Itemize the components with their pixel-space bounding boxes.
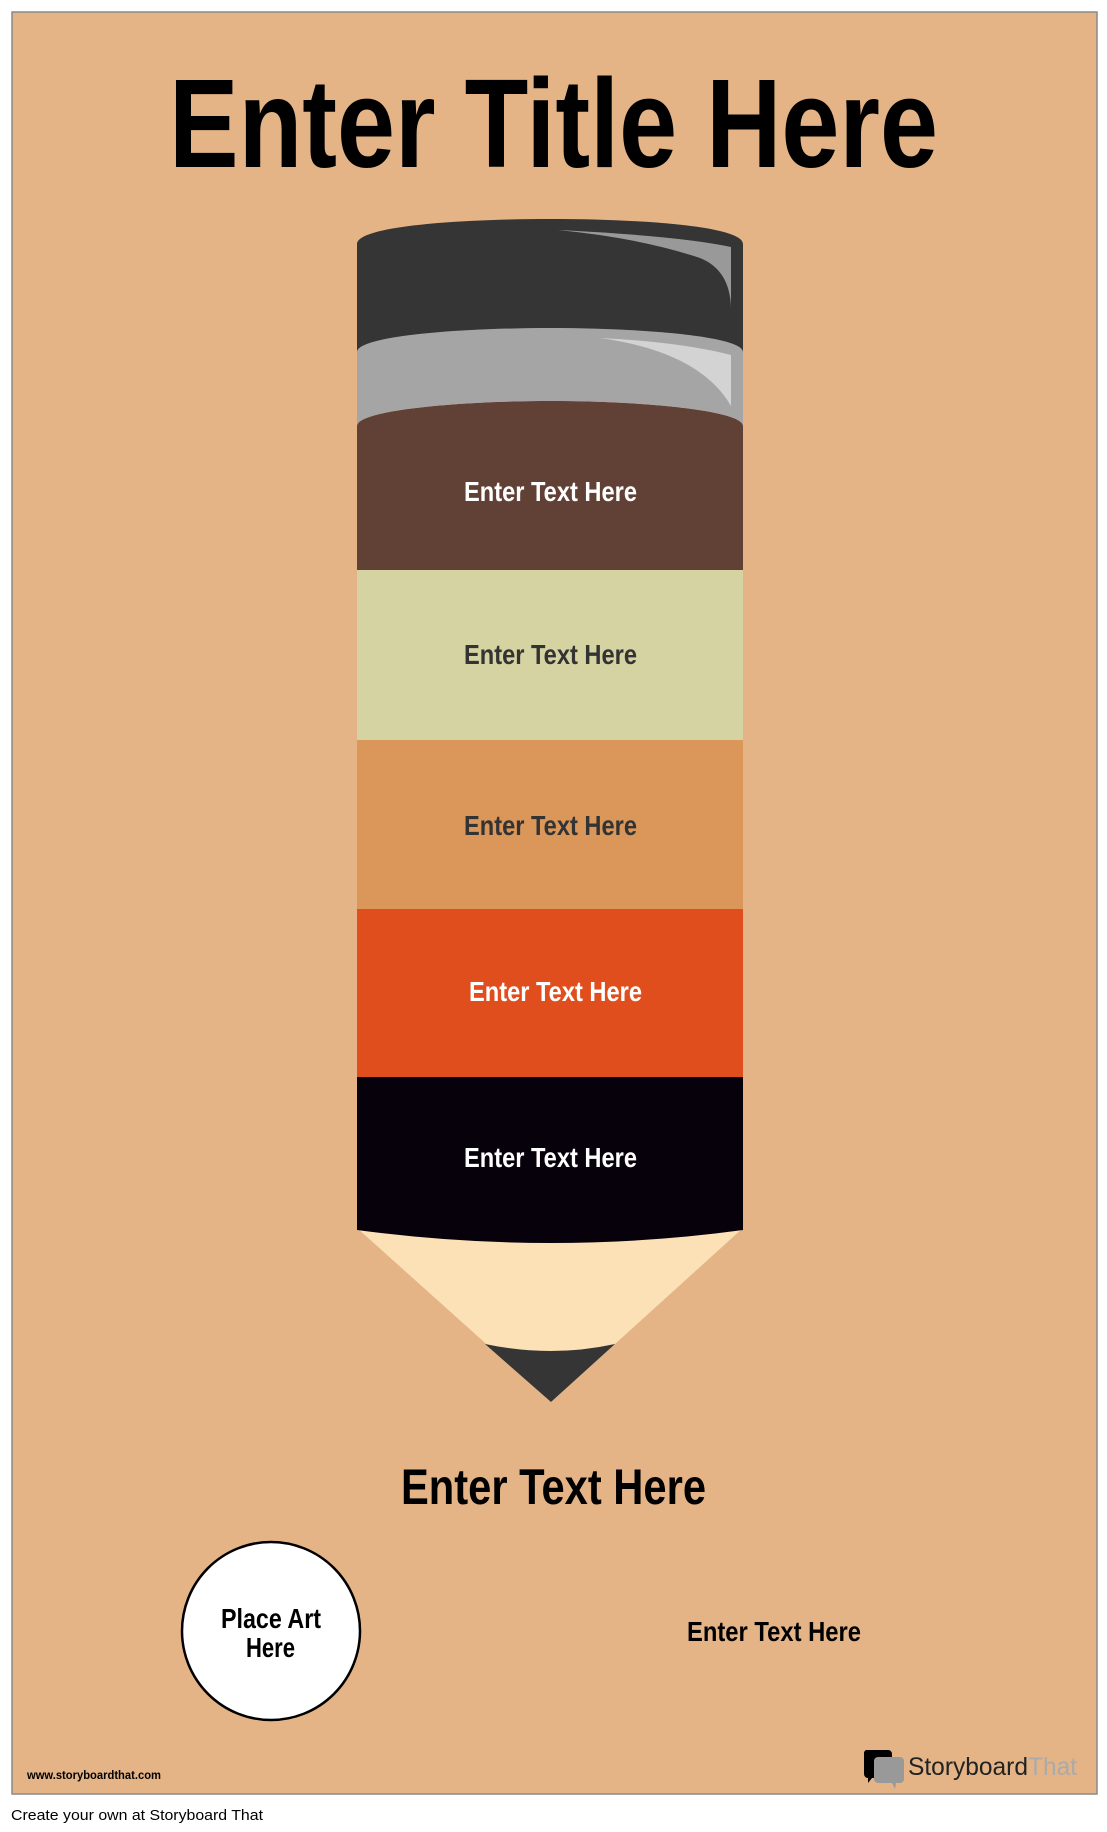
- footer credit: Create your own at Storyboard That: [11, 1807, 264, 1824]
- subheading: Enter Text Here: [401, 1459, 706, 1515]
- pencil lead: [485, 1344, 615, 1402]
- eraser cap: [357, 219, 743, 352]
- eraser highlight: [558, 230, 731, 308]
- band: orange: Enter Text Here: [469, 976, 642, 1007]
- logo: That: [1028, 1753, 1077, 1781]
- logo: [864, 1750, 1077, 1789]
- art placeholder circle: [182, 1542, 360, 1720]
- title: Enter Title Here: [169, 53, 938, 194]
- band: brown: Enter Text Here: [464, 476, 637, 507]
- website url: www.storyboardthat.com: [26, 1768, 161, 1782]
- pencil tip wood: [357, 1228, 743, 1402]
- pencil: [357, 219, 743, 1402]
- ferrule highlight: [600, 338, 731, 406]
- side text: Enter Text Here: [687, 1616, 861, 1647]
- band: tan: Enter Text Here: [464, 810, 637, 841]
- band: light green: Enter Text Here: [464, 639, 637, 670]
- logo: Storyboard: [908, 1753, 1028, 1781]
- band: light green: [357, 569, 743, 740]
- ferrule gray: [357, 328, 743, 426]
- band: black: [357, 1076, 743, 1243]
- band: black: Enter Text Here: [464, 1142, 637, 1173]
- band: tan: [357, 739, 743, 909]
- band: brown: [357, 401, 743, 570]
- art placeholder circle: Here: [246, 1632, 295, 1663]
- art placeholder circle: Place Art: [221, 1603, 321, 1634]
- band: orange: [357, 908, 743, 1077]
